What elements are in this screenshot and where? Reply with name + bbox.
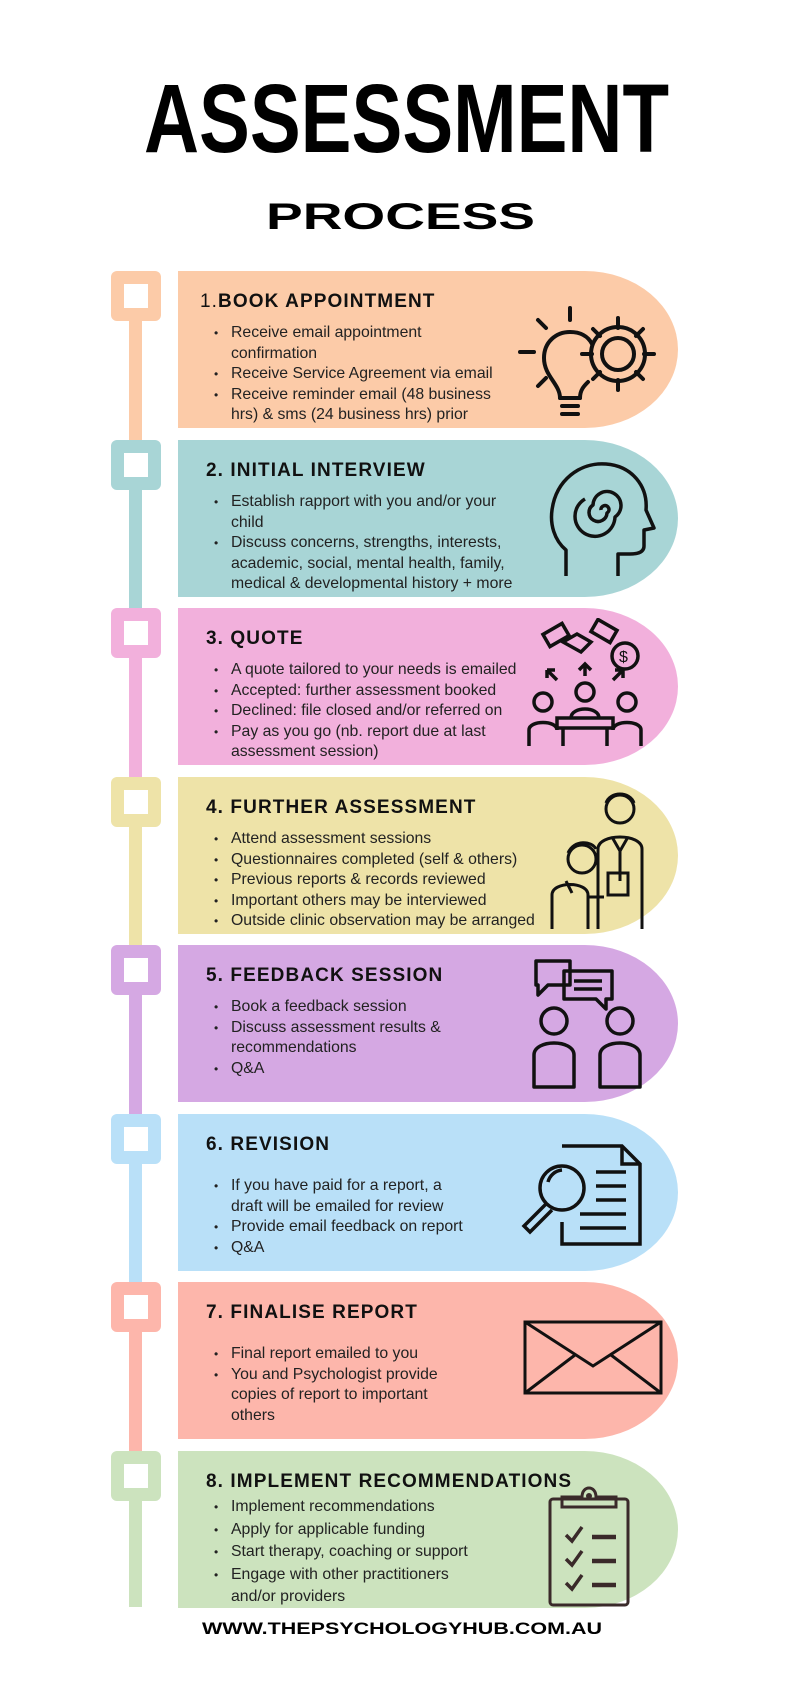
panel: 6 revision: Provide email feedback on report [231,1218,463,1235]
panel: 1 book appointment: 1.BOOK APPOINTMENT [200,291,436,312]
footer url: WWW.THEPSYCHOLOGYHUB.COM.AU [202,1619,602,1638]
panel: 8 implement recommendations [178,1451,678,1608]
panel: 6 revision: If you have paid for a report, a draft will be emailed for review [231,1177,443,1215]
icon: head spiral [550,462,656,576]
panel: 2 initial interview [178,440,678,597]
panel: 2 initial interview: Discuss concerns, strengths, interests, academic, social, mental health, family, medical & developmental history + more [231,534,512,592]
panel: 7 finalise report [178,1282,678,1439]
panel: 3 quote: Pay as you go (nb. report due at last assessment session) [231,723,486,760]
panel: 4 further assessment: Attend assessment sessions [231,830,431,847]
panel: 8 implement recommendations: Implement recommendations [231,1498,435,1515]
panel: 5 feedback session: Discuss assessment results & recommendations [231,1019,441,1056]
panel: 8 implement recommendations: Start therapy, coaching or support [231,1543,468,1560]
panel: 1 book appointment: Receive Service Agreement via email [231,365,493,382]
panel: 7 finalise report: 7. FINALISE REPORT [206,1302,418,1323]
panel: 7 finalise report: You and Psychologist provide copies of report to important others [231,1366,438,1424]
panel: 5 feedback session: Q&A [231,1060,264,1077]
icon: two people consulting [550,792,644,929]
panel: 1 book appointment [178,271,678,428]
panel: 1 book appointment: Receive email appointment confirmation [231,324,422,362]
panel: 5 feedback session [178,945,678,1102]
panel: 3 quote [178,608,678,765]
icon: meeting with handshake: $ [619,649,628,666]
panel: 7 finalise report: Final report emailed to you [231,1345,418,1362]
panel: 8 implement recommendations: 8. IMPLEMENT RECOMMENDATIONS [206,1471,572,1492]
panel: 1 book appointment: Receive reminder email (48 business hrs) & sms (24 business hrs) prior [231,386,491,423]
panel: 4 further assessment: 4. FURTHER ASSESSMENT [206,797,476,818]
panel: 4 further assessment: Important others may be interviewed [231,892,487,909]
icon: envelope [524,1320,662,1394]
panel: 2 initial interview: 2. INITIAL INTERVIEW [206,460,426,481]
icon: clipboard checklist [548,1486,630,1606]
panel: 6 revision [178,1114,678,1271]
panel: 4 further assessment [178,777,678,934]
icon: bulb and gear [518,306,656,416]
panel: 5 feedback session: 5. FEEDBACK SESSION [206,965,443,986]
title: PROCESS [266,196,535,237]
panel: 3 quote: A quote tailored to your needs is emailed [231,661,516,678]
panel: 3 quote: Declined: file closed and/or referred on [231,702,502,719]
icon: meeting with handshake [527,618,643,746]
timeline bars [111,271,161,1607]
panel: 2 initial interview: Establish rapport with you and/or your child [231,493,496,531]
panel: 3 quote: 3. QUOTE [206,628,303,649]
panel: 8 implement recommendations: Engage with other practitioners and/or providers [231,1566,449,1605]
panel: 6 revision: 6. REVISION [206,1134,330,1155]
panel: 5 feedback session: Book a feedback session [231,998,407,1015]
title [144,64,669,237]
title: ASSESSMENT [144,64,669,173]
icon: two people chatting [532,959,642,1089]
panel: 8 implement recommendations: Apply for applicable funding [231,1520,425,1538]
panel: 4 further assessment: Previous reports & records reviewed [231,871,486,888]
panel: 4 further assessment: Outside clinic observation may be arranged [231,912,535,929]
panel: 3 quote: Accepted: further assessment booked [231,682,496,699]
icon: magnifier over document [522,1144,642,1246]
panel: 6 revision: Q&A [231,1239,264,1256]
panel: 4 further assessment: Questionnaires completed (self & others) [231,851,517,868]
